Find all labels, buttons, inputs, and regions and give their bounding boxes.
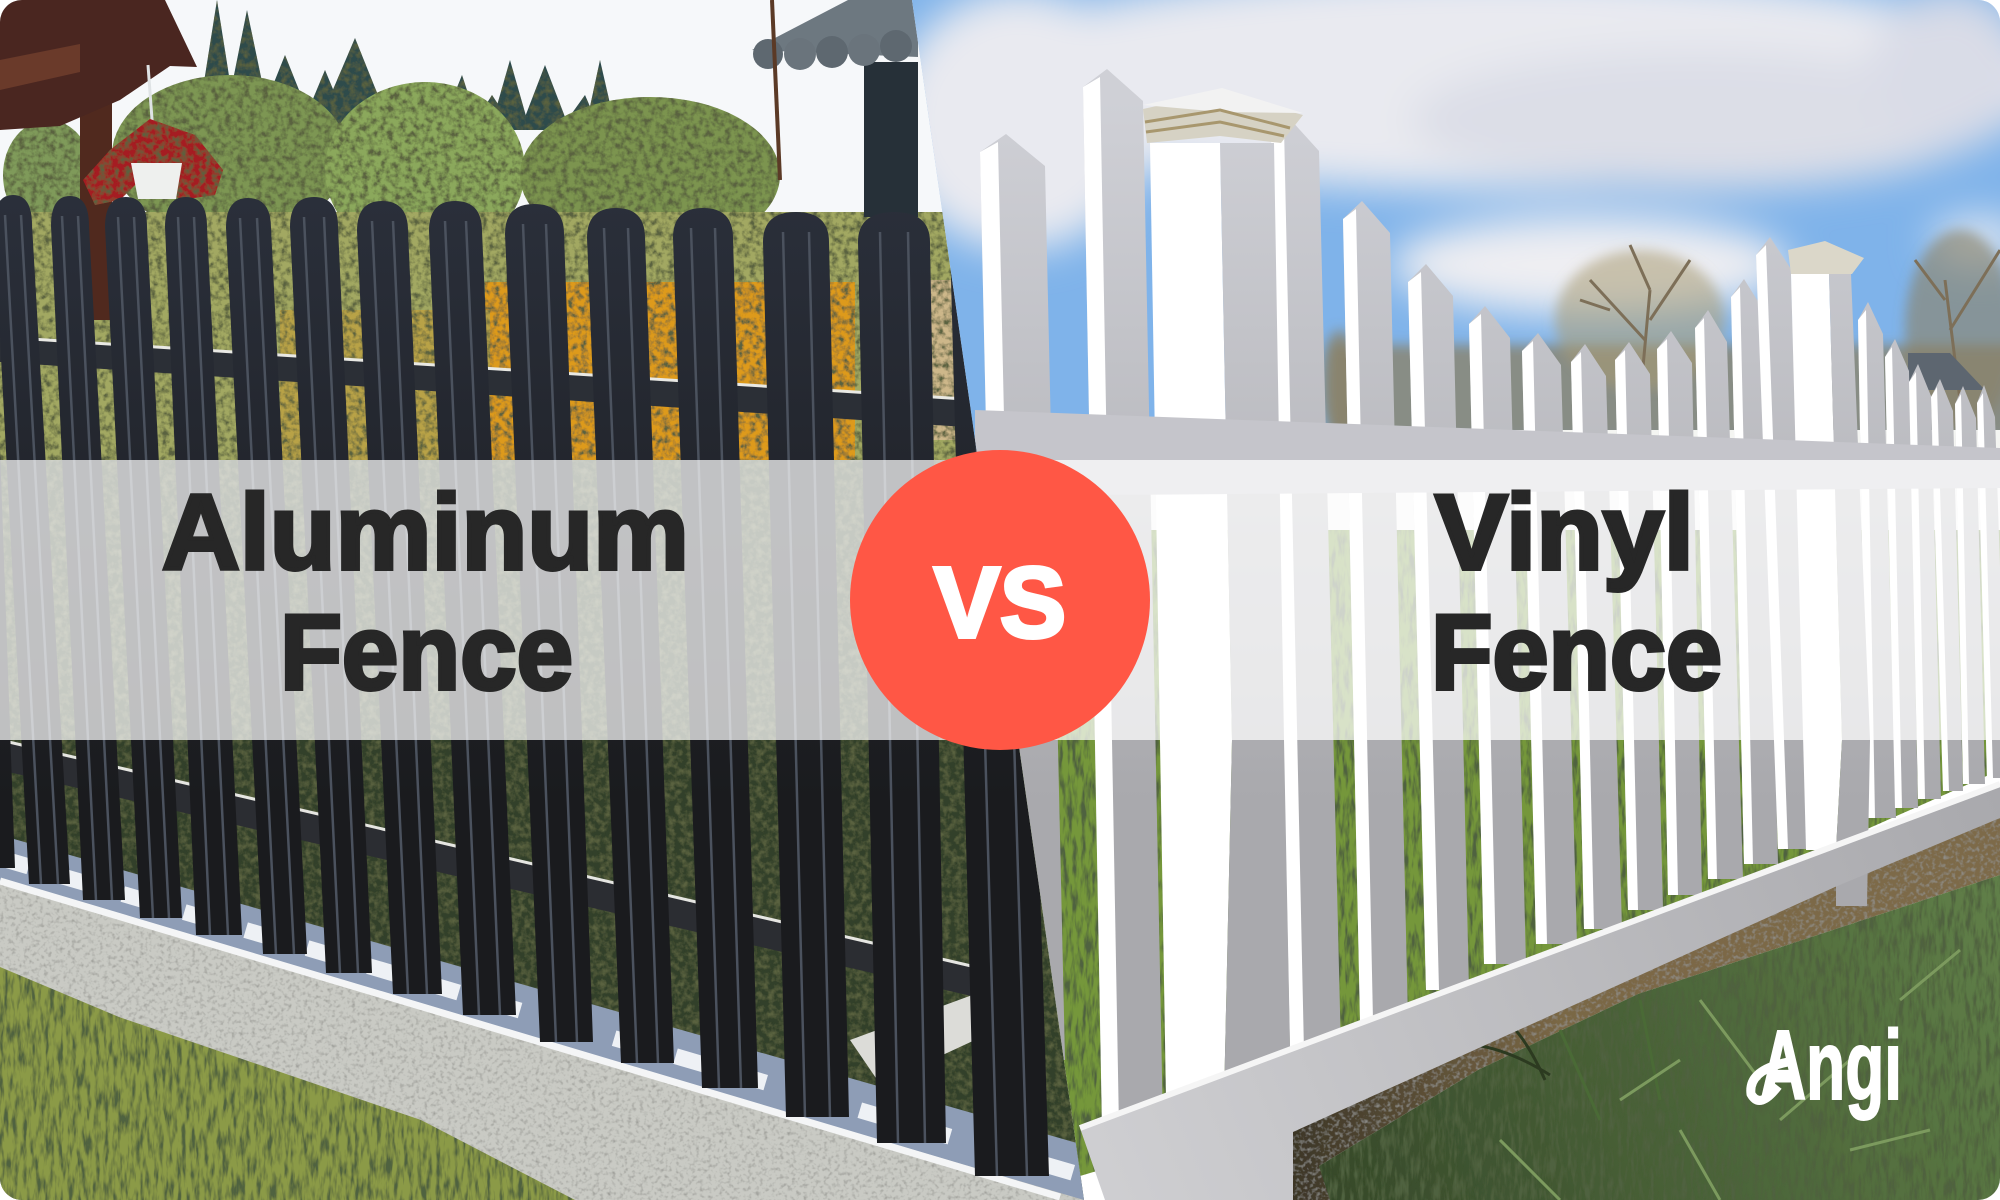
- grass blades: [1480, 949, 1961, 1200]
- aluminum pickets: [0, 195, 1049, 1176]
- ground grass: [0, 967, 575, 1200]
- heading: Vinyl Fence: [1431, 472, 1722, 712]
- heading: Vinyl Fence: Fence: [1431, 592, 1722, 712]
- panel: aluminum fence photo: [0, 0, 1090, 1200]
- fence bottom rail: [0, 740, 1010, 1005]
- picket ridges: [5, 215, 1027, 1176]
- mulch strip: [1270, 800, 2000, 1200]
- vinyl pickets: [980, 69, 2000, 1128]
- gazebo roof and post: [0, 0, 197, 320]
- lawn behind fence: [1000, 530, 2000, 1200]
- panel: vinyl fence photo: [890, 0, 2000, 1200]
- bare distant trees: [1320, 230, 2000, 440]
- VS badge: [850, 450, 1150, 750]
- foreground grass: [1319, 875, 2000, 1200]
- large vinyl post: [1143, 88, 1303, 1200]
- bottom rail: [1080, 784, 2000, 1200]
- lower foliage: [0, 460, 1090, 1200]
- hanging flower basket: [83, 65, 223, 205]
- heading: Vinyl Fence: Vinyl: [1435, 472, 1694, 592]
- pale background behind fence: [1150, 430, 2000, 530]
- sunlit picket edges: [980, 77, 1993, 1128]
- translucent title band: [0, 460, 2000, 740]
- concrete ledge with shadows: [0, 835, 1084, 1200]
- hedge behind fence: [0, 212, 1000, 467]
- concrete footing: [0, 881, 1084, 1200]
- neighbouring roof and post: [752, 0, 918, 217]
- distant conifers: [198, 0, 616, 130]
- Angi logo: [1751, 1010, 1902, 1120]
- VS badge: VS: [934, 547, 1066, 659]
- distant building roof: [1908, 353, 1985, 390]
- fence top rail: [0, 337, 980, 428]
- Angi logo: Angi: [1760, 1010, 1902, 1120]
- bare tree branches: [1580, 245, 2000, 400]
- green trees and bushes: [3, 75, 780, 212]
- concrete top edge: [0, 881, 1060, 1197]
- blue sky: [912, 0, 2000, 452]
- clouds: [890, 0, 2000, 315]
- sky: [0, 0, 942, 212]
- small vinyl post: [1788, 241, 1870, 906]
- top rail: [975, 410, 2000, 496]
- heading: Aluminum Fence: Fence: [280, 592, 573, 712]
- heading: Aluminum Fence: [162, 472, 689, 712]
- heading: Aluminum Fence: Aluminum: [162, 472, 689, 592]
